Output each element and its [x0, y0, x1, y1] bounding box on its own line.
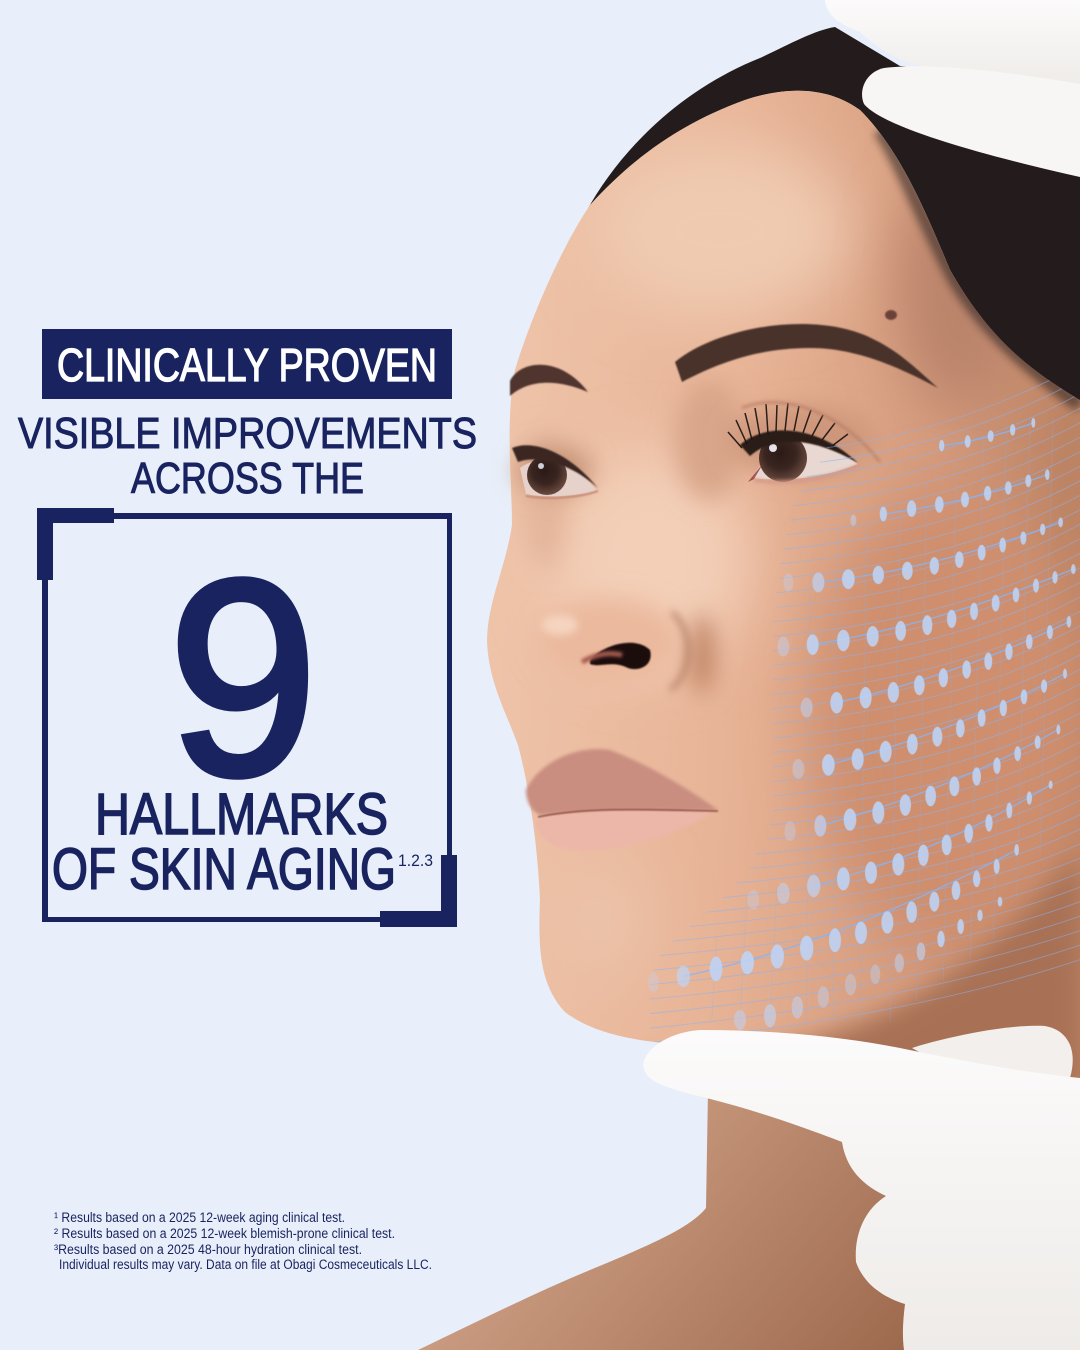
- subheading: [18, 409, 477, 503]
- headline banner: clinically proven: [42, 329, 452, 399]
- footnotes: Individual results may vary. Data on file at Obagi Cosmeceuticals LLC.: [59, 1257, 432, 1272]
- footnotes: [54, 1210, 432, 1272]
- frame corner top-left: [37, 508, 114, 580]
- mole: [885, 310, 897, 320]
- glove: bottom hand: [643, 1026, 1080, 1350]
- frame corner bottom-right: [380, 855, 457, 927]
- frame: [42, 513, 452, 922]
- nose: [540, 598, 688, 690]
- big number: 9: [168, 522, 318, 834]
- face shading: [523, 130, 1080, 1100]
- face base: [487, 91, 1080, 1090]
- blue skin grid overlay: [648, 365, 1080, 1043]
- hallmarks label: HALLMARKS: [95, 782, 388, 847]
- hair: [586, 27, 1080, 408]
- footnotes: ³Results based on a 2025 48-hour hydration clinical test.: [54, 1242, 362, 1257]
- glove: top fingers: [825, 0, 1080, 177]
- subheading: VISIBLE IMPROVEMENTS: [18, 409, 477, 458]
- lips: [526, 749, 718, 850]
- photo: woman's face in profile with gloved hands: [418, 0, 1080, 1350]
- far eye: [512, 445, 598, 498]
- subheading: ACROSS THE: [131, 454, 364, 503]
- footnotes: ¹ Results based on a 2025 12-week aging clinical test.: [54, 1210, 345, 1225]
- framed callout: 9 hallmarks: [37, 508, 457, 927]
- near eye: [728, 402, 880, 482]
- footnotes: ² Results based on a 2025 12-week blemish-prone clinical test.: [54, 1226, 395, 1241]
- neck and shoulder: [418, 1040, 1080, 1350]
- headline banner: clinically proven: CLINICALLY PROVEN: [57, 339, 437, 391]
- reference superscript: 1.2.3: [398, 851, 433, 870]
- skin aging label: OF SKIN AGING: [52, 837, 396, 902]
- eyebrows: [510, 324, 938, 396]
